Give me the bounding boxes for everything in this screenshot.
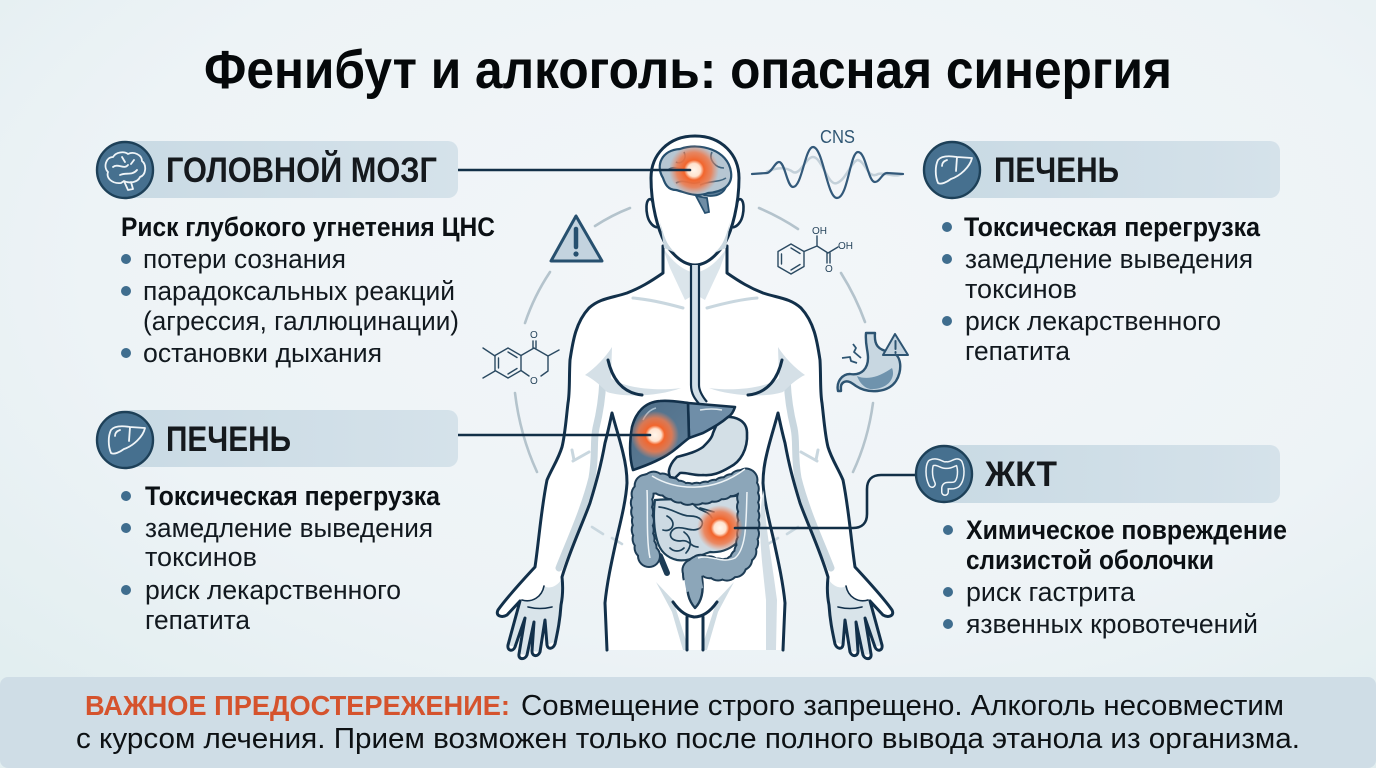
icon: phenyl molecule: OH	[838, 241, 853, 252]
text: liver left list: токсинов	[145, 542, 257, 572]
heading: liver left: ПЕЧЕНЬ	[166, 420, 291, 459]
head	[646, 136, 744, 265]
callout: warning footer	[0, 677, 1376, 768]
body figure	[497, 136, 893, 659]
connector: liver left	[458, 434, 650, 436]
body: left half	[497, 240, 696, 659]
esophagus	[691, 265, 707, 405]
text: brain list	[121, 212, 495, 368]
text: GI list: язвенных кровотечений	[966, 609, 1258, 639]
heading: GI tract: ЖКТ	[984, 455, 1057, 494]
panel: brain left	[97, 141, 495, 368]
text: liver right list: токсинов	[965, 274, 1077, 304]
icon: phenyl molecule: O	[825, 264, 833, 275]
icon: chromanone molecule: O	[530, 330, 538, 341]
icon: phenyl molecule	[778, 226, 853, 275]
text: liver left list: гепатита	[145, 605, 251, 635]
panel: liver right	[924, 141, 1280, 366]
text: brain list: (агрессия, галлюцинации)	[143, 306, 459, 336]
heading: liver left	[97, 410, 458, 468]
text: brain list: потери сознания	[143, 244, 346, 274]
icon: chromanone molecule: O	[530, 376, 538, 387]
text: liver right list: замедление выведения	[965, 244, 1253, 274]
connector: brain	[458, 169, 690, 171]
organ: small intestine	[654, 495, 740, 560]
text: liver left list: Токсическая перегрузка	[145, 481, 440, 511]
icon: warning triangle	[551, 216, 602, 261]
text: liver left list	[121, 481, 440, 635]
hotspot: brain	[669, 145, 719, 195]
icon: chromanone molecule	[483, 330, 559, 387]
panel: liver left	[97, 410, 458, 635]
text: GI list: риск гастрита	[966, 577, 1136, 607]
organ: brain	[660, 147, 731, 213]
heading: brain	[97, 141, 458, 198]
text: GI list: слизистой оболочки	[966, 545, 1214, 575]
text: brain list: парадоксальных реакций	[143, 276, 455, 306]
text: liver right list: гепатита	[965, 336, 1071, 366]
callout: warning footer: с курсом лечения. Прием возможен только после полного вывода этанола из организма.	[76, 723, 1300, 755]
icon: stomach with warning	[838, 333, 908, 391]
hip shading	[760, 490, 777, 650]
icon: phenyl molecule: OH	[812, 226, 827, 237]
hotspot: liver	[631, 411, 679, 459]
text: liver left list: замедление выведения	[145, 513, 433, 543]
connector: gut	[735, 475, 915, 528]
text: liver right list: риск лекарственного	[965, 306, 1221, 336]
callout: warning footer: Совмещение строго запрещено. Алкоголь несовместим	[521, 690, 1284, 722]
text: liver right list: Токсическая перегрузка	[964, 212, 1260, 242]
hotspot: intestine	[697, 505, 743, 551]
organ: stomach	[669, 417, 747, 478]
dashed orbit arcs	[515, 208, 873, 472]
heading: GI tract	[916, 445, 1280, 503]
text: liver left list: риск лекарственного	[145, 575, 401, 605]
title: Фенибут и алкоголь: опасная синергия	[204, 40, 1172, 100]
body: right half	[694, 240, 893, 659]
panel: GI tract right	[916, 445, 1287, 639]
text: brain list: остановки дыхания	[143, 338, 382, 368]
heading: liver right: ПЕЧЕНЬ	[994, 151, 1119, 190]
chart: CNS waveform	[752, 127, 903, 198]
text: GI list: Химическое повреждение	[966, 515, 1287, 545]
heading: brain: ГОЛОВНОЙ МОЗГ	[166, 150, 437, 190]
text: liver right list	[942, 212, 1260, 366]
text: GI list	[943, 515, 1287, 639]
callout: warning footer: ВАЖНОЕ ПРЕДОСТЕРЕЖЕНИЕ:	[85, 690, 510, 721]
heading: liver right	[924, 141, 1280, 198]
organ: liver	[630, 401, 735, 470]
organ: colon	[642, 469, 748, 608]
chart: CNS waveform: CNS	[820, 127, 855, 147]
text: brain list: Риск глубокого угнетения ЦНС	[121, 212, 495, 242]
